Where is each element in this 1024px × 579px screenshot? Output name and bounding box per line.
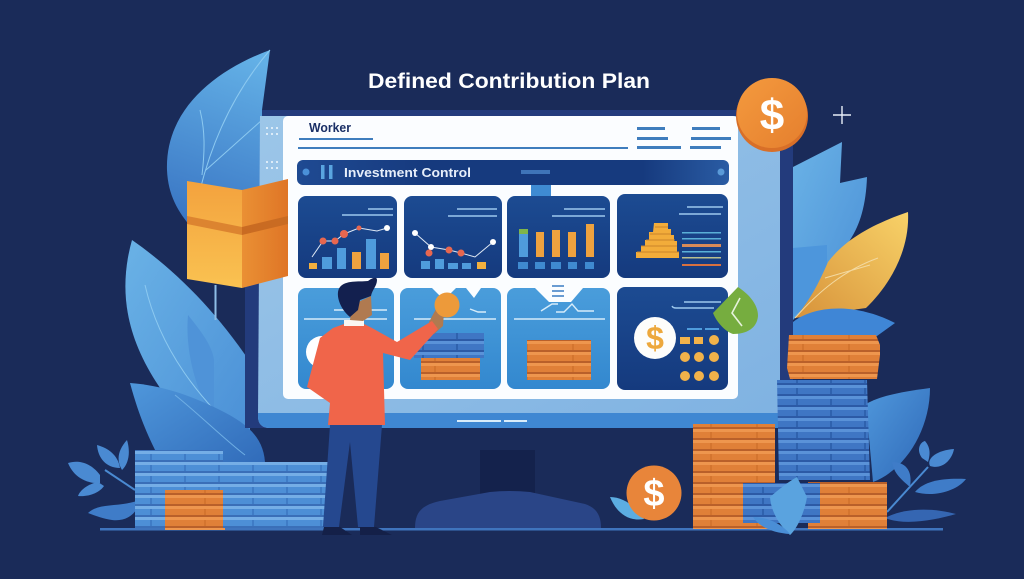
green leaf badge (713, 287, 758, 334)
header lines (298, 127, 731, 149)
right orange stack tall (693, 424, 775, 529)
dollar sign: $ (646, 320, 664, 356)
plus sparkle (833, 106, 851, 124)
worker figure (307, 278, 460, 535)
bottom coin leaf (610, 497, 644, 520)
wide blue coin stack (223, 462, 329, 528)
navigation bar (297, 160, 729, 185)
monitor (245, 110, 793, 528)
left orange coin stack (165, 490, 225, 530)
card: bar chart (507, 196, 610, 278)
card: light blue with worker behind (298, 288, 394, 389)
investment control label: Investment Control (344, 165, 471, 180)
leaf: middle left (125, 240, 250, 445)
top coin dollar: $ (760, 91, 784, 140)
legs (323, 425, 382, 527)
left sprig (68, 440, 140, 520)
card: line and bar chart (298, 196, 397, 278)
card: dollar and keypad (617, 287, 728, 390)
small blue stack (743, 483, 820, 523)
bottom coin: $ (643, 473, 665, 515)
leaf: right bottom (866, 388, 930, 482)
bottom coin (610, 466, 682, 520)
screen (283, 116, 738, 399)
monitor frame (245, 110, 793, 428)
leaf: lower left (130, 383, 265, 472)
left blue coin stack (135, 450, 223, 528)
top coin (736, 78, 808, 152)
leaf: tall right blue (793, 142, 867, 320)
monitor stand (415, 450, 601, 528)
right blue stack (777, 380, 870, 480)
monitor bezel (258, 116, 780, 428)
bezel dots (266, 127, 278, 169)
raised arm hand (429, 309, 444, 334)
card: gold pile and list (617, 194, 728, 278)
leaf: top left (167, 50, 270, 228)
title: Defined Contribution Plan (368, 70, 650, 93)
connector (531, 184, 551, 196)
shoes (322, 527, 392, 535)
leaf: right yellow (795, 212, 908, 318)
right orange stack bottom (808, 482, 887, 529)
ground line (100, 528, 943, 530)
card: orange coin stack (507, 286, 610, 389)
front leaf (753, 477, 807, 535)
hair (338, 278, 377, 317)
held coin (434, 292, 460, 318)
torso and arms (307, 321, 438, 425)
right orange stack top (787, 335, 880, 379)
card: coins with lines (400, 288, 501, 389)
card: falling line chart (404, 196, 502, 278)
right sprig (885, 441, 966, 522)
neck and face (350, 296, 372, 321)
hanging orange box (187, 179, 288, 320)
worker heading: Worker (309, 121, 351, 135)
leaf: right lower blue (793, 309, 895, 336)
